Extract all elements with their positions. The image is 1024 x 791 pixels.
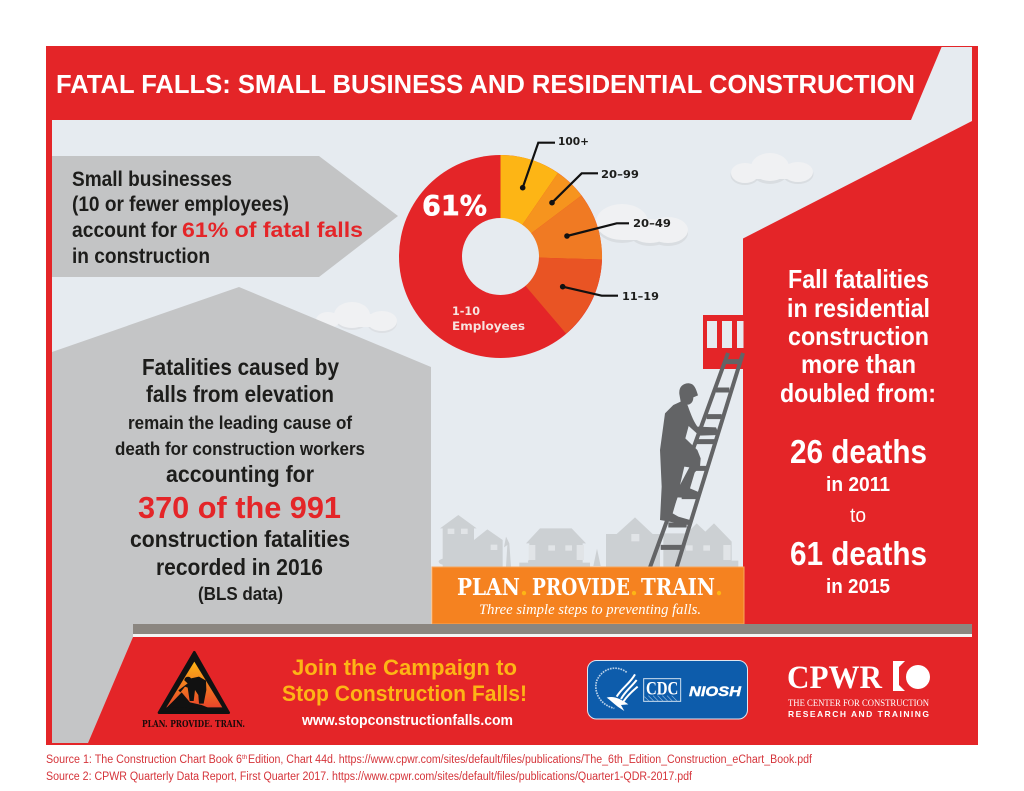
- panel: gray house with fatalities text: falls from elevation: [146, 381, 334, 407]
- panel: small businesses arrow: 61% of fatal falls: [182, 219, 363, 242]
- panel: gray house with fatalities text: death for construction workers: [115, 438, 365, 459]
- title banner: FATAL FALLS: SMALL BUSINESS AND RESIDENTIAL CONSTRUCTION: [56, 69, 915, 99]
- panel: red house with residential stats: in 2015: [826, 576, 890, 598]
- source notes: Source 2: CPWR Quarterly Data Report, First Quarter 2017. https://www.cpwr.com/sites/default/files/publications/Quarter1-QDR-2017.pdf: [46, 771, 693, 783]
- campaign call to action: Join the Campaign to: [292, 655, 517, 680]
- logo: CPWR: RESEARCH AND TRAINING: [788, 709, 929, 719]
- chart leader lines and labels: 20–99: [601, 169, 639, 181]
- banner: plan provide train: .: [715, 574, 723, 601]
- panel: red house with residential stats: construction: [788, 321, 929, 351]
- banner: plan provide train: PLAN: [457, 574, 520, 601]
- logo: CDC NIOSH badge: CDC: [646, 679, 678, 700]
- cloud: behind chart: [596, 204, 688, 246]
- logo: CPWR: CPWR: [787, 660, 883, 696]
- panel: small businesses arrow: account for: [72, 219, 177, 242]
- cloud: left: [316, 302, 397, 333]
- banner: plan provide train: PROVIDE: [532, 574, 630, 601]
- panel: small businesses arrow: [52, 156, 398, 277]
- campaign call to action: www.stopconstructionfalls.com: [301, 712, 513, 729]
- chart label: 1-10 employees: 1-10: [452, 304, 480, 318]
- panel: small businesses arrow: in construction: [72, 245, 210, 268]
- panel: small businesses arrow: (10 or fewer employees): [72, 193, 289, 216]
- logo: CPWR: THE CENTER FOR CONSTRUCTION: [788, 699, 929, 709]
- house window box: [703, 315, 744, 369]
- panel: gray house with fatalities text: 370 of the 991: [138, 490, 341, 525]
- icon: warning triangle with worker: PLAN. PROVIDE. TRAIN.: [142, 719, 245, 730]
- panel: gray house with fatalities text: construction fatalities: [130, 526, 350, 552]
- chart label: 1-10 employees: [452, 304, 525, 333]
- icon: warning triangle with worker: [142, 652, 245, 730]
- panel: small businesses arrow: Small businesses: [72, 168, 232, 191]
- banner: plan provide train: Three simple steps to preventing falls.: [479, 602, 701, 618]
- source notes: th: [242, 754, 248, 761]
- panel: red house with residential stats: Fall fatalities: [788, 264, 929, 294]
- logo: CDC NIOSH badge: [588, 660, 748, 719]
- panel: gray house with fatalities text: [52, 287, 431, 743]
- chart leader lines and labels: [520, 136, 671, 303]
- ground bar: [133, 624, 972, 637]
- cloud: upper right: [730, 153, 814, 185]
- panel: gray house with fatalities text: remain the leading cause of: [128, 412, 353, 433]
- panel: gray house with fatalities text: (BLS data): [198, 584, 283, 604]
- panel: red house with residential stats: to: [850, 505, 866, 527]
- banner: plan provide train: .: [630, 574, 638, 601]
- chart label: 61%: 61%: [422, 189, 487, 222]
- panel: red house with residential stats: [743, 121, 978, 745]
- donut chart: [399, 155, 602, 358]
- source notes: Source 1: The Construction Chart Book 6: [46, 754, 242, 766]
- source notes: [46, 754, 813, 783]
- panel: red house with residential stats: 61 deaths: [790, 535, 927, 572]
- panel: red house with residential stats: 26 deaths: [790, 433, 927, 470]
- neighborhood silhouette: [439, 515, 738, 567]
- panel: red house with residential stats: doubled from:: [780, 378, 936, 408]
- panel: footer red band: [46, 637, 978, 745]
- chart leader lines and labels: 100+: [558, 136, 589, 148]
- panel: red house with residential stats: more than: [801, 349, 916, 379]
- title banner: [46, 46, 942, 120]
- banner: plan provide train: .: [520, 574, 528, 601]
- logo: CDC NIOSH badge: NIOSH: [689, 683, 742, 699]
- banner: plan provide train: [432, 567, 744, 624]
- logo: CPWR: [787, 660, 930, 719]
- chart label: 1-10 employees: Employees: [452, 319, 525, 333]
- source notes: Edition, Chart 44d. https://www.cpwr.com/sites/default/files/publications/The_6th_Edition_Construction_eChart_Book.pdf: [248, 754, 813, 766]
- chart leader lines and labels: 20–49: [633, 218, 671, 230]
- panel: red house with residential stats: in residential: [787, 293, 930, 323]
- ladder and worker silhouette: [650, 353, 743, 567]
- campaign call to action: [282, 655, 527, 729]
- chart leader lines and labels: 11–19: [622, 291, 659, 303]
- banner: plan provide train: TRAIN: [641, 574, 715, 601]
- panel: red house with residential stats: in 2011: [826, 474, 890, 496]
- campaign call to action: Stop Construction Falls!: [282, 681, 527, 706]
- panel: gray house with fatalities text: recorded in 2016: [156, 554, 323, 580]
- panel: gray house with fatalities text: Fatalities caused by: [142, 354, 339, 380]
- panel: gray house with fatalities text: accounting for: [166, 461, 314, 487]
